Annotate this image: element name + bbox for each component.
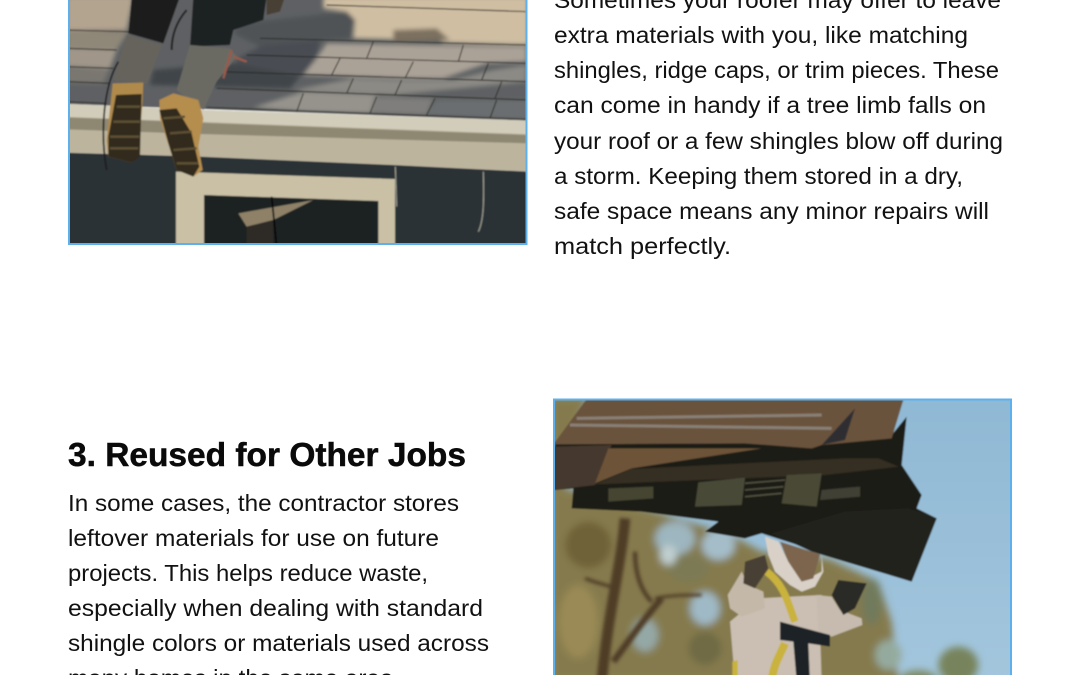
text block: section 2 body copy: extra materials with you, like matching bbox=[554, 22, 968, 48]
shingle stack, mid layers bbox=[553, 445, 612, 490]
legs bbox=[128, 0, 180, 43]
text block: section 3 body copy: shingle colors or materials used across bbox=[68, 630, 489, 656]
worker left arm bbox=[728, 572, 765, 617]
boots bbox=[107, 83, 143, 163]
shingle stack, top sheet bbox=[553, 397, 904, 448]
text block: section 3 body copy: projects. This helps reduce waste, bbox=[68, 560, 428, 586]
sunlit roof area bbox=[67, 0, 528, 119]
text block: section 2 body copy: can come in handy if a tree limb falls on bbox=[554, 92, 986, 118]
worker torso bbox=[730, 595, 822, 675]
text block: section 3 body copy: leftover materials for use on future bbox=[68, 525, 439, 551]
photo border bbox=[554, 400, 1011, 675]
worker right arm bbox=[817, 595, 862, 637]
safety harness bbox=[767, 572, 795, 622]
shingle stack, dark layers bbox=[555, 416, 936, 560]
dark siding wall bbox=[67, 153, 528, 247]
tree trunks bbox=[585, 518, 702, 675]
text block: section 3 body copy bbox=[68, 490, 489, 675]
photo: roofer sitting on shingle roof edge bbox=[67, 0, 528, 247]
text block: section 2 body copy: safe space means any minor repairs will bbox=[554, 198, 989, 224]
roof shingles base bbox=[67, 0, 528, 121]
text block: section 2 body copy bbox=[554, 0, 1003, 259]
worker hood bbox=[765, 537, 823, 592]
text block: section 2 body copy: match perfectly. bbox=[554, 233, 731, 259]
gloves bbox=[743, 555, 768, 588]
sky bbox=[550, 397, 1017, 675]
text block: section 2 body copy: a storm. Keeping them stored in a dry, bbox=[554, 163, 963, 189]
shingle course lines bbox=[67, 5, 528, 119]
text block: section 2 body copy: shingles, ridge caps, or trim pieces. These bbox=[554, 57, 999, 83]
photo border bbox=[69, 0, 526, 244]
photo: worker carrying stack of old shingles bbox=[550, 397, 1017, 675]
heading: 3. Reused for Other Jobs: 3. Reused for Other Jobs bbox=[68, 436, 466, 473]
text block: section 3 body copy: especially when dealing with standard bbox=[68, 595, 483, 621]
text block: section 2 body copy: your roof or a few shingles blow off during bbox=[554, 128, 1003, 154]
window frame and pane bbox=[176, 172, 395, 247]
eave and gutter bbox=[70, 116, 526, 172]
blurred trees bbox=[550, 397, 978, 675]
text block: section 3 body copy: In some cases, the contractor stores bbox=[68, 490, 459, 516]
